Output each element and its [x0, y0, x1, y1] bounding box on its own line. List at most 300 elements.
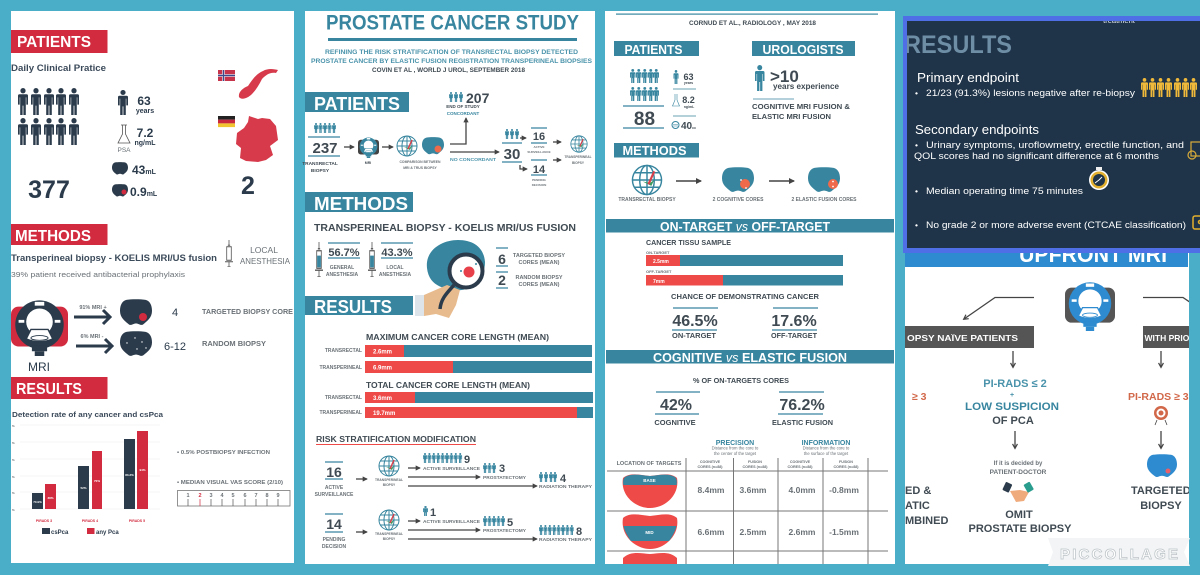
patient stats — [672, 70, 696, 132]
risk row: active surveillance 16: TRANSPERINEAL — [375, 478, 403, 482]
adverse events: No grade 2 or more adverse event (CTCAE classification) — [926, 220, 1186, 230]
icon: prostate mid — [623, 514, 677, 549]
on-target vs off-target banner: ON-TARGET vs OFF-TARGET — [660, 219, 830, 234]
prostate volume stat — [112, 162, 157, 177]
subtitle: PROSTATE CANCER BY ELASTIC FUSION REGISTRATION TRANSPERINEAL BIOPSIES — [311, 59, 592, 65]
risk row: pending decision 14: BIOPSY — [383, 537, 396, 541]
random biopsy row: RANDOM BIOPSY — [202, 339, 266, 348]
icon: transperineal biopsy globe: BIOPSY — [572, 161, 585, 165]
banner: upfront MRI — [905, 242, 1188, 267]
icon: prostate apex — [623, 553, 677, 564]
VAS scale: 8 — [265, 493, 269, 499]
outcome: targeted biopsy: BIOPSY — [1140, 500, 1182, 512]
icon: transperineal biopsy globe: TRANSPERINEAL — [564, 155, 592, 159]
arrows: MRI positive and negative: 91% MRI + — [79, 305, 107, 311]
VAS scale: 4 — [220, 493, 224, 499]
targeted biopsy row: 4 — [172, 307, 178, 319]
low suspicion criteria: LOW SUSPICION — [965, 401, 1059, 413]
table: precision and information: FUSION — [748, 460, 762, 464]
panel: prostate cancer study — [302, 11, 595, 564]
risk row: pending decision 14: PENDING — [323, 537, 346, 543]
chance of demonstrating cancer stats: ON-TARGET — [672, 331, 716, 340]
VAS scale: 5 — [231, 493, 235, 499]
on-target core stats: 42% — [660, 397, 692, 414]
risk row: active surveillance 16: 3 — [499, 463, 505, 475]
table: precision and information: Distance from the core to — [712, 446, 759, 450]
bar chart: detection rate: % — [12, 441, 15, 445]
table: precision and information: CORES (n=88) — [697, 465, 723, 469]
risk row: active surveillance 16: BIOPSY — [383, 483, 396, 487]
bar chart: detection rate — [12, 424, 160, 523]
bar chart: cancer tissue sample: 2.5mm — [653, 259, 669, 265]
patient count: 377 — [28, 176, 70, 204]
primary endpoint — [915, 71, 1136, 98]
on-target core stats: % OF ON-TARGETS CORES — [693, 378, 789, 385]
patient stats: 63 — [683, 72, 694, 82]
sticker: watermark: PICCOLLAGE — [1060, 546, 1178, 563]
risk stratification heading: RISK STRATIFICATION MODIFICATION — [316, 435, 476, 444]
arrow: concordant branch — [450, 118, 466, 144]
table: precision and information: CORES (n=88) — [742, 465, 768, 469]
bar chart: detection rate: 70.9% — [33, 500, 42, 504]
clipped text fragment: treatment — [1103, 16, 1136, 25]
end of study 207: 207 — [466, 90, 490, 106]
results heading: RESULTS — [904, 31, 1012, 59]
risk row: pending decision 14: DECISION — [322, 544, 346, 550]
methods flow: TRANSRECTAL BIOPSY — [618, 197, 676, 203]
risk row: active surveillance 16 — [315, 453, 592, 498]
VAS scale: 7 — [254, 493, 258, 499]
icon: yellow patients — [1141, 78, 1197, 97]
bar chart: maximum cancer core length: TRANSPERINEAL — [319, 365, 362, 371]
patient flow start: 237 — [302, 123, 340, 174]
local anesthesia stat: ANESTHESIA — [379, 272, 411, 278]
general anesthesia stat: 56.7% — [328, 247, 360, 259]
comparison icons: COMPARISON BETWEEN — [399, 160, 441, 164]
bar chart: total cancer core length — [319, 380, 593, 418]
local anesthesia stat: 43.3% — [381, 247, 413, 259]
table: precision and information: PRECISION — [716, 440, 754, 447]
bar chart: detection rate: % — [12, 458, 15, 462]
random biopsy row — [120, 331, 266, 356]
icon: ten patients — [18, 88, 79, 145]
secondary endpoints: Secondary endpoints — [915, 123, 1039, 137]
icon: Norway flag — [218, 70, 235, 81]
methods flow — [618, 165, 857, 203]
arrow: no concordant branch — [450, 152, 499, 163]
active surveillance 16: ACTIVE — [533, 145, 545, 149]
bar chart: maximum cancer core length: 6.9mm — [373, 366, 392, 372]
outcome: left fragment: ATIC — [905, 500, 930, 512]
methods heading: METHODS — [15, 228, 91, 245]
VAS scale: 9 — [276, 493, 280, 499]
PI-RADS 3 left fragment: ≥ 3 — [912, 391, 927, 403]
table: precision and information: 2.6mm — [789, 527, 816, 537]
icon: Norway map — [239, 69, 278, 99]
bar chart: detection rate: 52% — [80, 486, 87, 490]
icon: transperineal biopsy globe — [564, 136, 592, 165]
low suspicion criteria — [965, 378, 1059, 427]
risk row: active surveillance 16: PROSTATECTOMY — [483, 475, 526, 480]
age stat — [118, 90, 154, 115]
bar chart: detection rate: PIRADS 3 — [36, 519, 52, 523]
biopsy core stats: RANDOM BIOPSY — [515, 275, 563, 281]
bar chart: total cancer core length: TOTAL CANCER CORE LENGTH (MEAN) — [366, 380, 530, 390]
patient flow start: 237: 237 — [312, 140, 338, 157]
risk row: pending decision 14: RADIATION THERAPY — [539, 537, 592, 542]
comparison icons — [397, 136, 444, 170]
urologists heading: UROLOGISTS — [762, 42, 844, 57]
patient stats: years — [684, 81, 693, 85]
general anesthesia stat: ANESTHESIA — [326, 272, 358, 278]
local anesthesia stat — [368, 242, 413, 278]
risk row: pending decision 14: 5 — [507, 517, 513, 529]
icon: local anesthesia syringe — [225, 240, 290, 267]
icon: prostate base: BASE — [643, 478, 656, 483]
bar chart: detection rate: PIRADS 5 — [129, 519, 145, 523]
VAS scale: 3 — [209, 493, 213, 499]
VAS scale — [178, 490, 290, 506]
bar chart: detection rate: % — [12, 491, 15, 495]
risk row: pending decision 14: TRANSPERINEAL — [375, 532, 403, 536]
sticker: watermark — [1048, 538, 1190, 566]
methods subtitle: TRANSPERINEAL BIOPSY - KOELIS MRI/US FUSION — [314, 222, 576, 234]
urologist experience: >10 — [770, 67, 799, 86]
risk row: pending decision 14: 1 — [430, 507, 436, 519]
table: precision and information: the center of the target — [714, 451, 757, 456]
end of study 207: END OF STUDY — [446, 104, 480, 109]
chart legend: csPca — [51, 530, 69, 536]
risk row: pending decision 14: PROSTATECTOMY — [483, 528, 526, 533]
risk row: active surveillance 16: SURVEILLANCE — [315, 492, 354, 498]
table: precision and information — [607, 440, 888, 564]
results heading — [11, 377, 108, 399]
countries count: 2 — [241, 172, 255, 200]
general anesthesia stat: GENERAL — [330, 265, 354, 271]
patients heading: PATIENTS — [624, 42, 683, 57]
secondary endpoints: • — [915, 140, 918, 150]
biopsy core stats: TARGETED BIOPSY — [513, 253, 565, 259]
arrows: to transperineal biopsy — [553, 142, 561, 160]
targeted biopsy row — [120, 299, 293, 325]
table: precision and information: FUSION — [839, 460, 853, 464]
icon: MRI scanner — [1065, 282, 1115, 331]
chance of demonstrating cancer stats — [671, 292, 820, 340]
active surveillance 16: 16 — [533, 131, 545, 143]
active surveillance 16 — [527, 128, 551, 154]
arrows: MRI positive and negative — [74, 305, 112, 353]
table: precision and information: LOCATION OF TARGETS — [617, 461, 682, 467]
panel: upfront MRI flowchart — [905, 242, 1196, 566]
bar chart: maximum cancer core length: 2.6mm — [373, 350, 392, 356]
secondary endpoints: Urinary symptoms, uroflowmetry, erectile function, and — [926, 140, 1184, 150]
pending decision 14: PENDING — [532, 178, 546, 182]
methods flow: 2 ELASTIC FUSION CORES — [791, 197, 857, 203]
chance of demonstrating cancer stats: OFF-TARGET — [771, 331, 817, 340]
prostate volume stat: 43mL — [132, 163, 157, 177]
bar chart: detection rate: % — [12, 475, 15, 479]
patient stats: 8.2 — [682, 95, 695, 105]
icon: MRI scanner — [358, 138, 379, 165]
PSA stat: PSA — [117, 147, 131, 154]
bar chart: total cancer core length: 19.7mm — [373, 411, 395, 417]
infection note: • 0.5% POSTBIOPSY INFECTION — [177, 450, 270, 456]
icon: Germany map — [236, 116, 278, 162]
results heading: RESULTS — [314, 297, 392, 317]
bar chart: maximum cancer core length: TRANSRECTAL — [325, 348, 362, 354]
age stat: 63 — [137, 94, 151, 108]
primary endpoint: 21/23 (91.3%) lesions negative after re-biopsy — [926, 88, 1136, 98]
outcome: left fragment: ED & — [905, 485, 931, 497]
biopsy core stats: 2 — [498, 272, 506, 288]
on-target core stats: COGNITIVE — [654, 418, 696, 427]
icon: local anesthesia syringe: ANESTHESIA — [240, 256, 290, 266]
patient flow start: 237: TRANSRECTAL — [302, 161, 338, 167]
no concordant 30 — [502, 129, 527, 169]
bar chart: detection rate: PIRADS 4 — [82, 519, 98, 523]
methods heading — [11, 224, 108, 245]
box: biopsy naive patients — [905, 326, 1034, 348]
biopsy core stats: CORES (MEAN) — [519, 282, 560, 288]
daily clinical practice label: Daily Clinical Pratice — [11, 63, 106, 74]
risk row: pending decision 14: ACTIVE SURVEILLANCE — [423, 519, 480, 524]
box: with prior biopsy: WITH PRIOR — [1144, 333, 1196, 343]
methods description — [11, 253, 217, 279]
methods heading: METHODS — [622, 143, 687, 158]
table: precision and information: the surface of the target — [804, 451, 849, 456]
arrows: down from boxes — [1013, 351, 1161, 367]
random biopsy row: 6-12 — [164, 341, 186, 353]
urologist experience: COGNITIVE MRI FUSION & — [752, 102, 851, 111]
on-target vs off-target banner — [606, 219, 894, 234]
targeted biopsy row: TARGETED BIOPSY CORE — [202, 307, 293, 316]
arrows: next step down — [1015, 431, 1161, 448]
decision note — [990, 461, 1047, 476]
subtitle: REFINING THE RISK STRATIFICATION OF TRANSRECTAL BIOPSY DETECTED — [325, 50, 579, 56]
icon: prostate base — [623, 474, 677, 508]
table: precision and information: CORES (n=88) — [787, 465, 813, 469]
table: precision and information: CORES (n=88) — [833, 465, 859, 469]
PSA stat: ng/mL — [134, 140, 156, 147]
risk row: active surveillance 16: 9 — [464, 454, 470, 466]
bar chart: detection rate: 38% — [47, 496, 54, 500]
low suspicion criteria: OF PCA — [992, 415, 1034, 427]
icon: prostate mid: MID — [645, 530, 654, 535]
patient stats: 40cc — [681, 121, 696, 132]
panel: Cornud et al study — [605, 11, 895, 564]
panel: results dark slide — [903, 16, 1200, 253]
table: precision and information: 3.6mm — [740, 485, 767, 495]
bar chart: total cancer core length: TRANSPERINEAL — [319, 410, 362, 416]
adverse events: • — [915, 220, 918, 230]
title: PROSTATE CANCER STUDY — [326, 12, 579, 34]
box: biopsy naive patients: OPSY NAÏVE PATIENTS — [907, 333, 1018, 343]
risk row: active surveillance 16: ACTIVE — [325, 485, 344, 491]
table: precision and information: COGNITIVE — [790, 460, 811, 464]
age stat: years — [136, 108, 154, 115]
low suspicion criteria: PI-RADS ≤ 2 — [983, 378, 1047, 390]
bar chart: cancer tissue sample: OFF-TARGET — [646, 269, 672, 274]
secondary endpoints — [914, 123, 1184, 161]
on-target core stats — [654, 378, 833, 427]
chart legend — [42, 528, 119, 536]
box: with prior biopsy — [1143, 326, 1189, 348]
bar chart: cancer tissue sample: ON-TARGET — [646, 250, 670, 255]
patient flow start: 237: BIOPSY — [311, 168, 330, 174]
VAS scale: 1 — [186, 493, 190, 499]
icon: local anesthesia syringe: LOCAL — [250, 245, 278, 255]
arrow: to comparison — [382, 146, 393, 148]
operating time: • — [915, 186, 918, 196]
subtitle — [311, 50, 592, 74]
patients heading — [614, 41, 699, 57]
VAS score note: • MEDIAN VISUAL VAS SCORE (2/10) — [177, 480, 283, 486]
end of study 207: CONCORDANT — [447, 111, 479, 116]
biopsy core stats — [496, 248, 565, 288]
chance of demonstrating cancer stats: CHANCE OF DEMONSTRATING CANCER — [671, 292, 820, 301]
table: precision and information: -0.8mm — [829, 485, 859, 495]
arrows: MRI branches — [964, 298, 1194, 319]
icon: MRI scanner: MRI — [28, 360, 50, 374]
table: precision and information: Distance from the core to — [803, 446, 850, 450]
bar chart: cancer tissue sample: 7mm — [653, 279, 665, 285]
outcome: left fragment: MBINED — [905, 515, 948, 527]
citation: CORNUD ET AL., RADIOLOGY , MAY 2018 — [689, 20, 816, 27]
urologist experience: ELASTIC MRI FUSION — [752, 112, 831, 121]
risk row: active surveillance 16: RADIATION THERAPY — [539, 484, 592, 489]
icon: MRI scanner — [11, 300, 68, 374]
on-target core stats: ELASTIC FUSION — [772, 418, 833, 427]
patients heading: PATIENTS — [314, 94, 400, 114]
lesion volume stat: 0.9mL — [130, 185, 158, 199]
arrow: no concordant branch: NO CONCORDANT — [450, 157, 496, 163]
risk row: pending decision 14: 8 — [576, 526, 582, 538]
decision note: If it is decided by — [994, 461, 1043, 467]
icon: yellow clipboard — [1193, 216, 1200, 229]
primary endpoint: • — [915, 88, 918, 98]
panel: daily clinical practice study — [11, 11, 294, 563]
general anesthesia stat — [315, 242, 360, 278]
arrow: to MRI — [344, 146, 354, 148]
no concordant 30: 30 — [504, 146, 520, 163]
on-target core stats: 76.2% — [779, 397, 825, 414]
methods flow: 2 COGNITIVE CORES — [713, 197, 764, 203]
table: precision and information: 4.0mm — [789, 485, 816, 495]
risk row: active surveillance 16: 16 — [326, 464, 342, 480]
chance of demonstrating cancer stats: 17.6% — [771, 313, 817, 330]
bar chart: total cancer core length: TRANSRECTAL — [325, 395, 362, 401]
table: precision and information: 6.6mm — [698, 527, 725, 537]
PI-RADS 3 right: PI-RADS ≥ 3 — [1128, 391, 1189, 403]
lesion volume stat — [112, 184, 158, 199]
patient stats: ng/mL — [684, 105, 695, 109]
banner: upfront MRI: UPFRONT MRI — [1019, 242, 1167, 267]
local anesthesia stat: LOCAL — [386, 265, 404, 271]
bar chart: total cancer core length: 3.6mm — [373, 396, 392, 402]
pending decision 14 — [531, 160, 547, 187]
urologist experience — [752, 65, 851, 121]
bar chart: maximum cancer core length — [319, 332, 592, 373]
bar chart: detection rate: % — [12, 508, 15, 512]
bar chart: detection rate: 94% — [139, 468, 146, 472]
icon: Germany flag — [218, 116, 235, 127]
cognitive vs elastic fusion banner — [606, 350, 894, 365]
low suspicion criteria: + — [1010, 392, 1014, 399]
methods description: 39% patient received antibacterial prophylaxis — [11, 270, 185, 279]
outcome: targeted biopsy: TARGETED — [1131, 485, 1191, 497]
methods heading: METHODS — [314, 194, 408, 214]
cognitive vs elastic fusion banner: COGNITIVE vs ELASTIC FUSION — [653, 350, 847, 365]
active surveillance 16: SURVEILLANCE — [527, 150, 551, 154]
biopsy core stats: CORES (MEAN) — [519, 260, 560, 266]
chart legend: any Pca — [96, 530, 119, 536]
icon: target — [1154, 406, 1168, 425]
table: precision and information: INFORMATION — [802, 440, 850, 447]
PSA stat: 7.2 — [137, 126, 154, 140]
VAS scale: 6 — [243, 493, 247, 499]
subtitle: COVIN ET AL , WORLD J UROL, SEPTEMBER 2018 — [372, 68, 526, 74]
primary endpoint: Primary endpoint — [917, 71, 1020, 85]
bar chart: detection rate: 83.3% — [125, 473, 134, 477]
end of study 207 — [446, 90, 490, 116]
bar chart: detection rate: 70% — [94, 479, 100, 483]
bar chart: maximum cancer core length: MAXIMUM CANCER CORE LENGTH (MEAN) — [366, 332, 549, 342]
bar chart: cancer tissue sample: CANCER TISSU SAMPLE — [646, 238, 731, 247]
decision note: PATIENT-DOCTOR — [990, 469, 1047, 476]
bar chart: cancer tissue sample — [646, 238, 843, 286]
biopsy core stats: 6 — [498, 251, 506, 267]
methods description: Transperineal biopsy - KOELIS MRI/US fusion — [11, 253, 217, 264]
outcome: omit prostate biopsy — [968, 509, 1072, 535]
chart title: Detection rate of any cancer and csPca — [12, 410, 164, 419]
operating time: Median operating time 75 minutes — [926, 186, 1084, 196]
VAS scale: 2 — [198, 493, 202, 499]
comparison icons: MRI & TRUS BIOPSY — [403, 166, 437, 170]
patient count 88 — [623, 69, 664, 130]
icon: magnified prostate with hand — [415, 240, 485, 318]
table: precision and information: 8.4mm — [698, 485, 725, 495]
chance of demonstrating cancer stats: 46.5% — [672, 313, 718, 330]
outcome: left fragment — [905, 485, 948, 527]
arrows: MRI positive and negative: 6% MRI - — [81, 334, 104, 340]
pending decision 14: 14 — [533, 164, 546, 176]
urologist experience: years experience — [773, 82, 840, 91]
risk row: pending decision 14 — [322, 506, 592, 550]
outcome: omit prostate biopsy: PROSTATE BIOPSY — [968, 523, 1072, 535]
risk row: active surveillance 16: ACTIVE SURVEILLANCE — [423, 466, 480, 471]
patient count 88: 88 — [634, 109, 655, 130]
icon: yellow bladder tool — [1188, 142, 1200, 159]
bar chart: detection rate: % — [12, 424, 15, 428]
outcome: targeted biopsy — [1131, 486, 1189, 509]
table: precision and information: -1.5mm — [829, 527, 859, 537]
results heading: RESULTS — [16, 381, 82, 398]
table: precision and information: 2.5mm — [740, 527, 767, 537]
outcome: omit prostate biopsy: OMIT — [1005, 509, 1033, 521]
icon: handshake — [1002, 482, 1034, 502]
secondary endpoints: QOL scores had no significant difference at 6 months — [914, 151, 1160, 161]
icon: MRI scanner: MRI — [365, 161, 371, 165]
icon: stopwatch — [1089, 167, 1109, 190]
PSA stat — [117, 125, 156, 154]
patients heading — [11, 30, 108, 53]
pending decision 14: DECISION — [532, 183, 546, 187]
risk row: active surveillance 16: 4 — [560, 473, 567, 485]
patients heading: PATIENTS — [17, 34, 91, 51]
risk row: pending decision 14: 14 — [326, 516, 342, 532]
table: precision and information: COGNITIVE — [700, 460, 721, 464]
icon: prostate with target — [1147, 454, 1177, 477]
